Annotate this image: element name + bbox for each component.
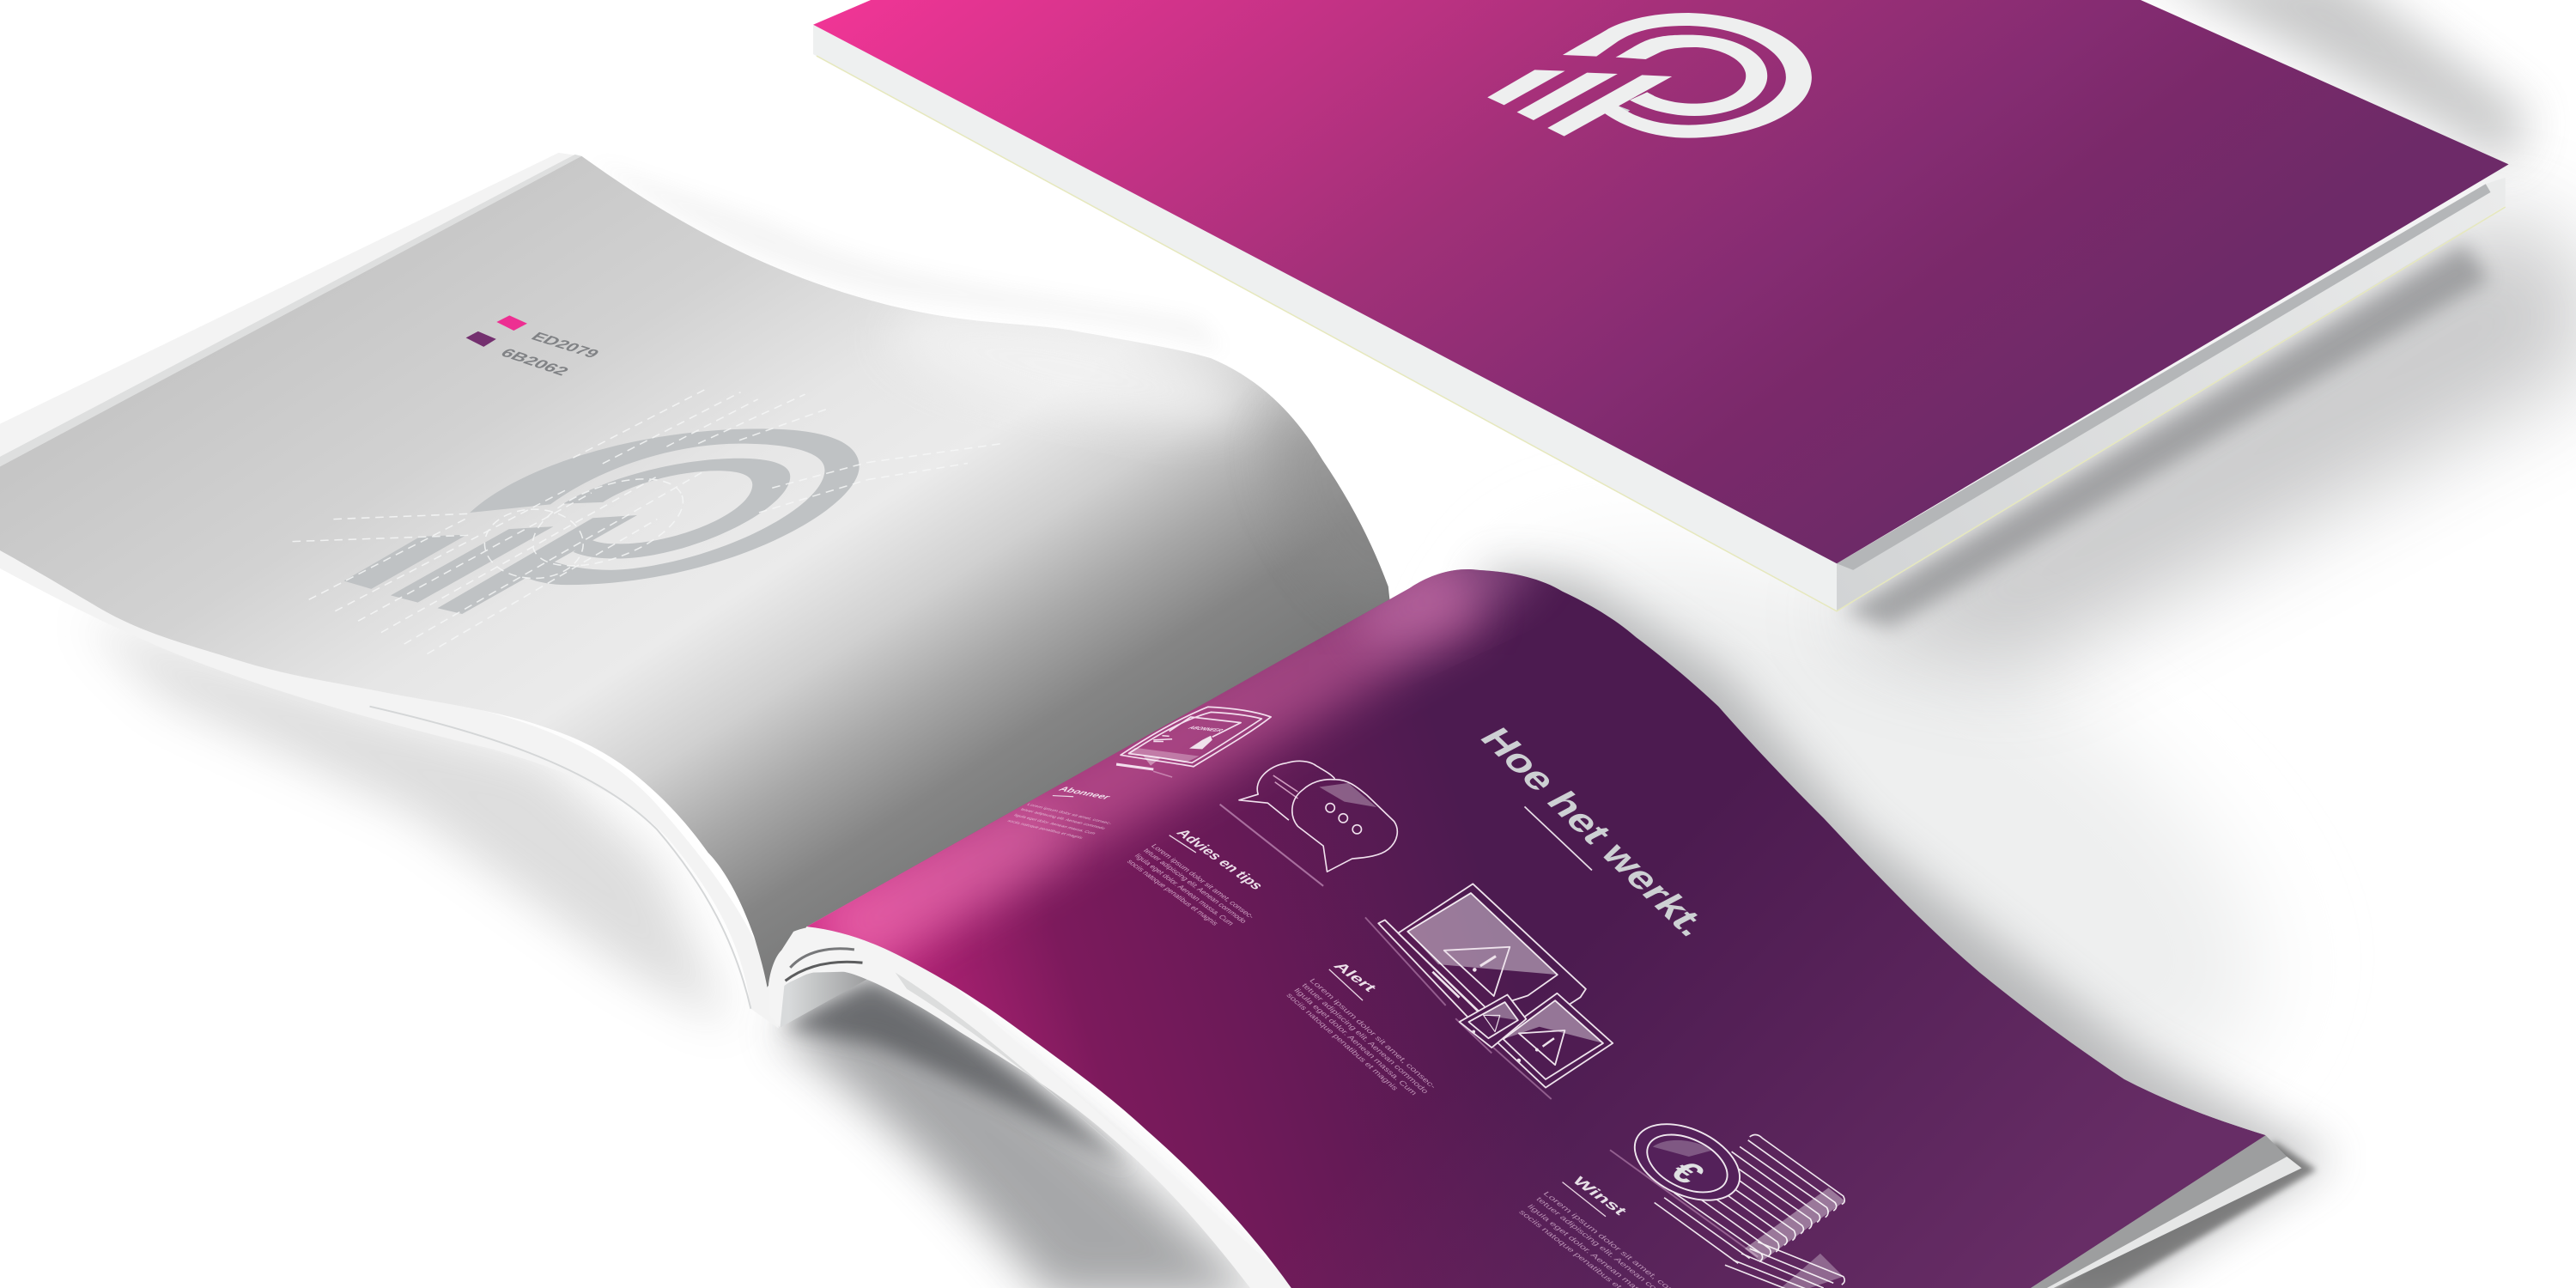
icon ground lines: [1365, 917, 1552, 1099]
shadows of the closed book: [1837, 0, 2576, 673]
bubble lines: [1273, 775, 1297, 799]
upper stack strips: [1655, 1135, 1844, 1263]
logo inner ring: [1616, 35, 1767, 116]
coin outer: [1623, 1109, 1752, 1216]
body text: Abonneer: sociis natoque penatibus et magnis: [1005, 819, 1084, 840]
cover strip shade: [0, 155, 581, 466]
coin inner: [1638, 1123, 1736, 1204]
open magazine: right page block: [769, 927, 2301, 1288]
construction logo shapes: [343, 428, 860, 614]
body text: Alert: tetuer adipiscing elit. Aenean commodo: [1300, 982, 1431, 1095]
step: Abonneer: [1005, 707, 1271, 840]
closed brochure: [813, 0, 2509, 611]
page layer shadows: [786, 949, 862, 981]
lower stack strips: [1725, 1242, 1844, 1288]
right stack wedge: [780, 972, 870, 1028]
body text: Alert: sociis natoque penatibus et magnis: [1285, 992, 1400, 1092]
closed brochure: page block right edge: [1837, 178, 2506, 611]
stack highlight band: [1745, 1188, 1845, 1261]
swatch ED2079: [496, 315, 527, 331]
logo bars: [1487, 70, 1672, 137]
body text: Winst: ligula eget dolor. Aenean massa. Cum: [1526, 1203, 1674, 1288]
icon: speech bubbles: [1239, 761, 1397, 872]
icon: hand pointer: [1189, 736, 1212, 749]
body text: Advies en tips: tetuer adipiscing elit. Aenean commodo: [1142, 848, 1249, 924]
step: Advies en tips: [1125, 761, 1397, 927]
body text: Winst: tetuer adipiscing elit. Aenean commodo: [1534, 1196, 1686, 1288]
icon: coin stacks: [1623, 1109, 1845, 1288]
icon: monitor: [1116, 707, 1271, 777]
laptop base: [1378, 920, 1487, 1029]
monitor base: [1116, 764, 1153, 769]
icon ground line: [1220, 805, 1323, 886]
phone: [1460, 994, 1526, 1048]
back speech bubble: [1239, 761, 1335, 820]
tablet: [1494, 993, 1613, 1088]
laptop screen highlight: [1407, 893, 1558, 975]
right stack of pages: [769, 927, 1297, 1288]
body text: Winst: sociis natoque penatibus et magnis: [1517, 1209, 1653, 1288]
label: Advies en tips: Advies en tips: [1173, 827, 1267, 892]
bubble highlight: [1319, 783, 1376, 807]
right page tone and spine glow: [807, 569, 2265, 1288]
logo construction drawing: [293, 388, 1002, 653]
inside cover strip: [0, 153, 581, 466]
colour swatches: [466, 315, 604, 378]
coin highlight: [1653, 1140, 1714, 1157]
body text: Winst: Lorem ipsum dolor sit amet, consec-: [1541, 1190, 1694, 1288]
right page: [807, 569, 2265, 1288]
closed brochure: inner page shadow: [1837, 184, 2491, 570]
body text: Alert: ligula eget dolor. Aenean massa. Cum: [1292, 987, 1419, 1097]
body text: Abonneer: [1005, 803, 1113, 840]
label 6B2062: 6B2062: [497, 346, 573, 378]
left page highlight and fold shading: [936, 331, 1386, 580]
label ED2079: ED2079: [527, 330, 604, 361]
monitor text lines: [1153, 736, 1172, 741]
closed brochure: cover logo: [1487, 13, 1812, 138]
logo outer ring: [1563, 13, 1812, 138]
left page: [0, 156, 1453, 987]
right page paper: [806, 569, 2265, 1288]
body text: Winst: [1517, 1190, 1694, 1288]
closed brochure: cover: [813, 0, 2509, 563]
heading underline: [1525, 806, 1592, 870]
monitor lower band: [1127, 748, 1200, 762]
monitor outer frame: [1121, 707, 1271, 767]
label underline: [1563, 1182, 1606, 1217]
monitor inner frame: [1128, 712, 1261, 762]
swatch 6B2062: [466, 331, 496, 347]
body text: Advies en tips: sociis natoque penatibus et magnis: [1125, 859, 1220, 927]
laptop slot: [1432, 972, 1460, 998]
monitor stand: [1144, 756, 1161, 766]
right bottom page edge gray: [2031, 1135, 2287, 1288]
monitor shadow line: [1153, 771, 1172, 777]
laptop body: [1398, 884, 1586, 1027]
body text: Advies en tips: ligula eget dolor. Aenean massa. Cum: [1133, 853, 1236, 927]
step: Winst: [1517, 1109, 1845, 1288]
body text: Abonneer: ligula eget dolor. Aenean massa. Cum: [1012, 814, 1097, 835]
body text: Abonneer: Lorem ipsum dolor sit amet, consec-: [1025, 803, 1113, 825]
step: Alert: [1285, 884, 1613, 1099]
logo fold shadow: [1630, 92, 1655, 104]
shadows of the open magazine: [82, 161, 2333, 1288]
icon ground line: [1610, 1150, 1758, 1257]
closed brochure: paper tint line: [817, 56, 2506, 611]
label underline: [1329, 969, 1363, 1000]
label: Abonneer: Abonneer: [1056, 786, 1113, 801]
monitor button label: ABONNEER: [1186, 726, 1225, 733]
body text: Advies en tips: Lorem ipsum dolor sit amet, consec-: [1150, 842, 1256, 920]
bubble dots: [1326, 804, 1334, 812]
warning triangle: [1444, 947, 1510, 996]
label underline: [1170, 835, 1196, 853]
icon: euro sign: €: [1661, 1156, 1713, 1189]
icon: devices with warning: [1378, 884, 1613, 1088]
label: Winst: Winst: [1568, 1175, 1631, 1218]
body text: Abonneer: tetuer adipiscing elit. Aenean commodo: [1019, 808, 1106, 830]
body text: Alert: [1285, 977, 1438, 1097]
left stack of pages: [0, 547, 779, 1029]
right bottom page edge white: [2047, 1157, 2301, 1288]
laptop screen: [1407, 893, 1558, 1009]
open magazine: left page block: [0, 153, 779, 1029]
left stack shade line: [369, 707, 750, 1009]
heading: Hoe het werkt.: Hoe het werkt.: [1472, 722, 1718, 942]
label: Alert: Alert: [1330, 960, 1381, 994]
closed brochure: page block left edge: [813, 25, 1837, 611]
body text: Alert: Lorem ipsum dolor sit amet, consec-: [1308, 977, 1438, 1090]
monitor button box: [1170, 717, 1241, 737]
logo fold shadow lower: [1604, 106, 1630, 118]
construction guide lines: [293, 388, 1002, 653]
front speech bubble: [1292, 780, 1397, 872]
background light tone: [1403, 447, 2342, 1196]
left page paper: [0, 156, 1390, 987]
label underline: [1053, 796, 1073, 797]
page layer tone: [896, 973, 1133, 1163]
